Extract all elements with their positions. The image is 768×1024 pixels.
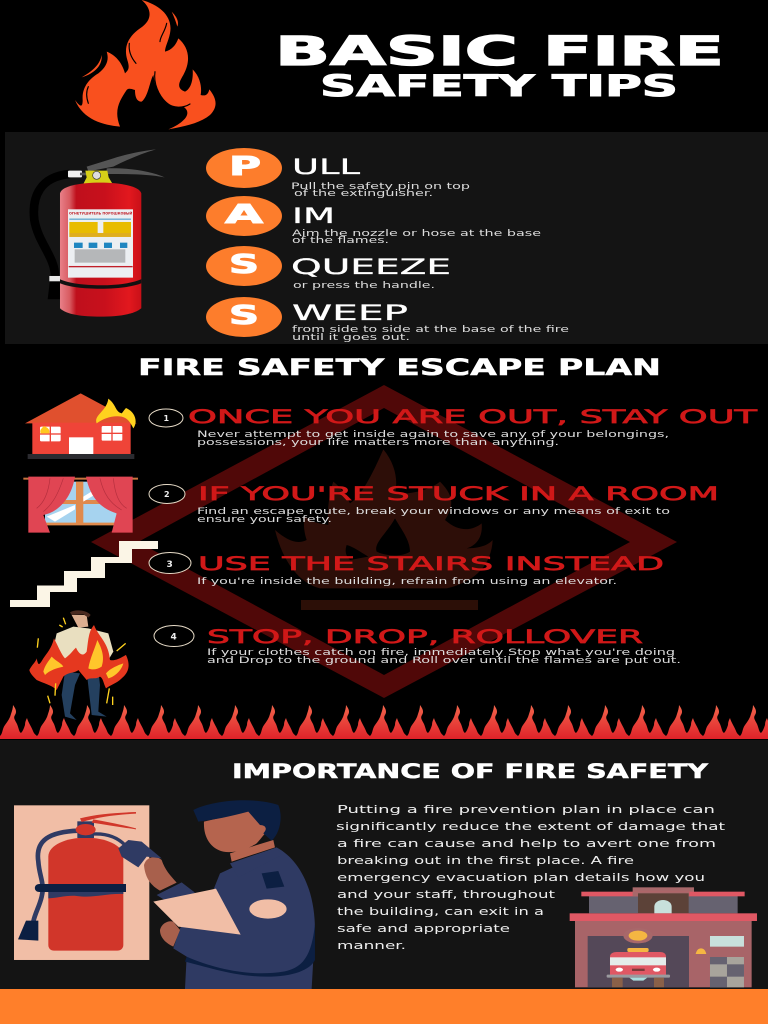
title: SAFETY TIPS: [320, 69, 678, 103]
description 4: If your clothes catch on fire, immediately Stop what you're doing: [207, 648, 675, 658]
paragraph: [336, 804, 725, 952]
step 3: [149, 552, 664, 587]
P badge: P: [229, 152, 261, 182]
icon: man on fire: [29, 610, 129, 720]
sweep text: until it goes out.: [292, 333, 410, 343]
A badge: [206, 196, 282, 236]
step 1: [149, 406, 758, 448]
squeeze text: or press the handle.: [293, 281, 435, 291]
paragraph: the building, can exit in a: [337, 906, 544, 918]
label text: ОГНЕТУШИТЕЛЬ ПОРОШКОВЫЙ: [69, 210, 133, 215]
badge 4: 4: [170, 632, 177, 642]
pull text: of the extinguisher.: [294, 189, 433, 199]
sweep text: WEEP: [292, 301, 408, 325]
diamond background sign: [91, 385, 677, 698]
badge 4: [154, 626, 194, 646]
heading 3: USE THE STAIRS INSTEAD: [198, 553, 664, 575]
paragraph: a fire can cause and help to avert one from: [337, 838, 716, 850]
heading: escape plan: FIRE SAFETY ESCAPE PLAN: [138, 356, 661, 381]
badge 2: [149, 484, 185, 504]
sweep text: from side to side at the base of the fire: [292, 325, 570, 335]
badge 1: 1: [164, 414, 170, 423]
sweep text: [292, 301, 570, 343]
S badge: [206, 297, 282, 337]
description 2: [197, 507, 671, 525]
description 1: possessions, your life matters more than anything.: [197, 438, 559, 448]
aim text: of the flames.: [292, 236, 389, 246]
squeeze text: QUEEZE: [291, 255, 451, 279]
aim text: Aim the nozzle or hose at the base: [292, 229, 542, 239]
A badge: A: [225, 200, 263, 230]
icon: window with curtains: [23, 477, 138, 533]
poster: extinguisher: [14, 805, 149, 960]
icon: burning house: [25, 393, 137, 459]
badge 2: 2: [164, 490, 170, 499]
flame border: [0, 705, 768, 739]
step 4: [154, 626, 681, 666]
flame logo: [75, 0, 216, 129]
icon: fire extinguisher: [34, 149, 165, 317]
footer bar: [0, 989, 768, 1024]
step 2: [149, 483, 719, 525]
title: BASIC FIRE: [275, 29, 724, 75]
icon: stairs: [10, 541, 158, 607]
paragraph: and your staff, throughout: [337, 889, 555, 901]
S badge: S: [229, 301, 259, 331]
S badge: S: [229, 250, 259, 280]
paragraph: emergency evacuation plan details how you: [337, 872, 705, 884]
panel: importance of fire safety: [0, 740, 768, 989]
squeeze text: [291, 255, 451, 291]
badge 1: [149, 409, 183, 427]
paragraph: manner.: [337, 940, 406, 952]
illustration: fire officer: [118, 800, 315, 989]
description 1: [197, 430, 669, 448]
title: [275, 29, 724, 103]
illustration: fire station: [570, 887, 757, 987]
pull text: [291, 155, 470, 199]
description 2: ensure your safety.: [197, 515, 332, 525]
paragraph: safe and appropriate: [337, 923, 510, 935]
heading: importance: IMPORTANCE OF FIRE SAFETY: [232, 760, 709, 783]
heading 2: IF YOU'RE STUCK IN A ROOM: [198, 483, 719, 505]
aim text: [292, 204, 542, 246]
description 4: and Drop to the ground and Roll over until the flames are put out.: [207, 656, 681, 666]
paragraph: breaking out in the first place. A fire: [337, 855, 634, 867]
heading 1: ONCE YOU ARE OUT, STAY OUT: [188, 406, 758, 428]
description 4: [207, 648, 681, 666]
S badge: [206, 246, 282, 286]
paragraph: Putting a fire prevention plan in place can: [337, 804, 715, 816]
pull text: ULL: [292, 155, 361, 179]
description 3: If you're inside the building, refrain from using an elevator.: [197, 577, 617, 587]
aim text: IM: [292, 204, 335, 228]
description 1: Never attempt to get inside again to save any of your belongings,: [197, 430, 669, 440]
paragraph: significantly reduce the extent of damage that: [336, 821, 725, 833]
panel: PASS: [5, 132, 768, 344]
pull text: Pull the safety pin on top: [291, 182, 470, 192]
P badge: [206, 148, 282, 188]
badge 3: [149, 552, 191, 574]
badge 3: 3: [166, 560, 173, 570]
description 2: Find an escape route, break your windows or any means of exit to: [197, 507, 671, 517]
heading 4: STOP, DROP, ROLLOVER: [207, 626, 643, 648]
